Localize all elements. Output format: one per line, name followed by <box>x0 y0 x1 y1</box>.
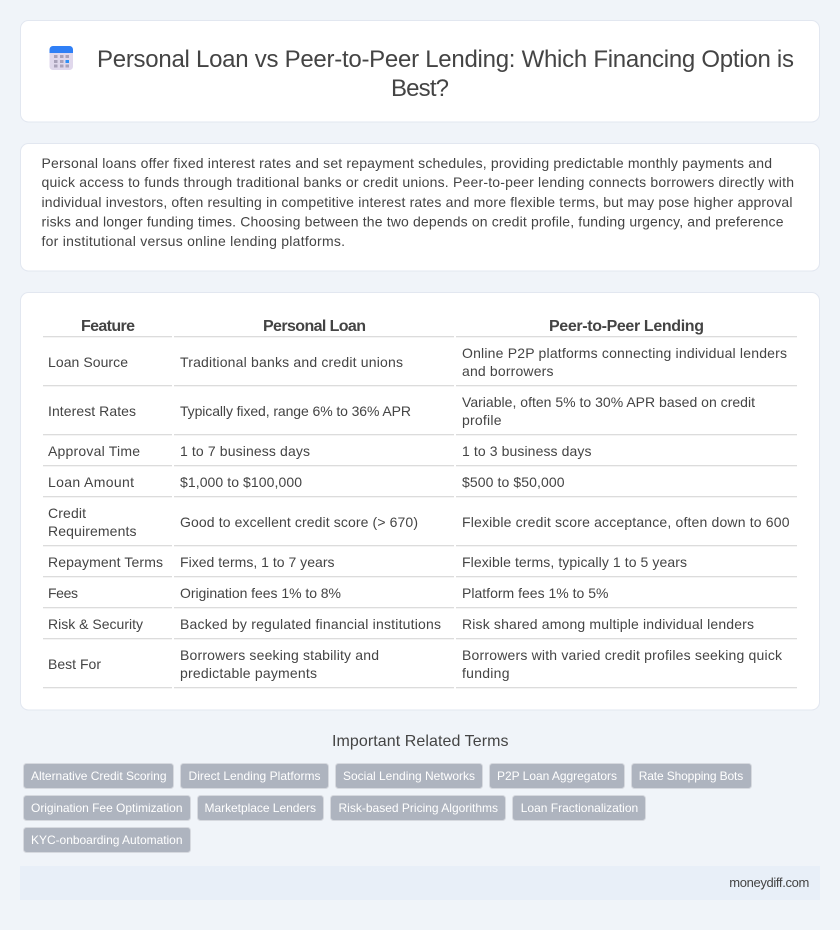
row: risk and security: Risk shared among multiple individual lenders <box>462 616 754 632</box>
footer <box>20 866 820 900</box>
row: repayment terms <box>48 554 687 570</box>
title <box>97 46 794 102</box>
chip: loan fractionalization: Loan Fractionalization <box>521 801 638 815</box>
title: Personal Loan vs Peer-to-Peer Lending: Which Financing Option is <box>97 46 794 73</box>
row: interest rates: Interest Rates <box>48 403 136 419</box>
row: interest rates <box>48 394 755 428</box>
row: loan source: and borrowers <box>462 363 554 379</box>
table header row: Peer-to-Peer Lending <box>549 318 704 335</box>
title: Best? <box>391 75 449 102</box>
row: repayment terms: Repayment Terms <box>48 554 163 570</box>
row: loan amount: Loan Amount <box>48 474 134 490</box>
panel: introduction text: for institutional versus online lending platforms. <box>42 233 345 249</box>
row: best for: funding <box>462 665 510 681</box>
table header row: Personal Loan <box>263 318 366 335</box>
row: loan source: Online P2P platforms connecting individual lenders <box>462 345 787 361</box>
chip: risk-based pricing algorithms: Risk-based Pricing Algorithms <box>338 801 498 815</box>
panel: title header <box>20 20 820 122</box>
panel: comparison table <box>20 292 820 710</box>
panel: introduction text: risks and longer funding times. Choosing between the two depends on credit profile, funding urgency, and preference <box>42 214 784 230</box>
panel: introduction text: individual investors, often resulting in competitive interest rates and more flexible terms, but may pose higher approval <box>42 194 792 210</box>
row: interest rates: profile <box>462 412 502 428</box>
row: loan source: Traditional banks and credit unions <box>180 354 403 370</box>
panel: introduction text: quick access to funds through traditional banks or credit unions. Peer-to-peer lending connects borrowers directly with <box>42 174 794 190</box>
row: interest rates: Typically fixed, range 6% to 36% APR <box>180 403 411 419</box>
row: risk and security: Backed by regulated financial institutions <box>180 616 441 632</box>
footer: moneydiff.com <box>729 875 809 890</box>
row: fees <box>48 585 608 601</box>
table header row: Feature <box>81 318 135 335</box>
row: fees: Fees <box>48 585 78 601</box>
chip: kyc-onboarding automation <box>24 828 190 852</box>
row: risk and security <box>48 616 754 632</box>
row: loan amount: $500 to $50,000 <box>462 474 565 490</box>
panel: introduction text <box>20 144 820 271</box>
chip: alternative credit scoring <box>24 764 174 788</box>
row: loan amount <box>48 474 565 490</box>
row: fees: Platform fees 1% to 5% <box>462 585 608 601</box>
chip: rate shopping bots <box>632 764 752 788</box>
row: best for: Borrowers seeking stability and <box>180 647 379 663</box>
row: credit requirements: Requirements <box>48 523 136 539</box>
row: loan source: Loan Source <box>48 354 128 370</box>
row: approval time <box>48 443 592 459</box>
chip: direct lending platforms: Direct Lending Platforms <box>188 769 320 783</box>
table header row <box>81 318 704 335</box>
chip: origination fee optimization <box>24 796 190 820</box>
row: approval time: 1 to 7 business days <box>180 443 310 459</box>
chip: origination fee optimization: Origination Fee Optimization <box>31 801 182 815</box>
row: credit requirements: Credit <box>48 505 86 521</box>
row: credit requirements: Flexible credit score acceptance, often down to 600 <box>462 514 790 530</box>
icon: calendar <box>50 46 73 70</box>
row: approval time: 1 to 3 business days <box>462 443 592 459</box>
row: loan source <box>48 345 787 379</box>
row: best for: predictable payments <box>180 665 317 681</box>
related terms chips <box>24 764 752 852</box>
chip: risk-based pricing algorithms <box>330 796 506 820</box>
row: credit requirements <box>48 505 790 539</box>
chip: loan fractionalization <box>512 796 646 820</box>
chip: alternative credit scoring: Alternative Credit Scoring <box>31 769 166 783</box>
row: interest rates: Variable, often 5% to 30% APR based on credit <box>462 394 755 410</box>
panel: introduction text: Personal loans offer fixed interest rates and set repayment schedules, providing predictable monthly payments and <box>42 155 772 171</box>
row: credit requirements: Good to excellent credit score (> 670) <box>180 514 418 530</box>
row: risk and security: Risk & Security <box>48 616 143 632</box>
chip: social lending networks: Social Lending Networks <box>343 769 475 783</box>
row: fees: Origination fees 1% to 8% <box>180 585 341 601</box>
chip: marketplace lenders: Marketplace Lenders <box>204 801 316 815</box>
row: approval time: Approval Time <box>48 443 140 459</box>
heading: important related terms: Important Related Terms <box>332 733 508 750</box>
row: loan amount: $1,000 to $100,000 <box>180 474 302 490</box>
row: best for: Best For <box>48 656 101 672</box>
chip: marketplace lenders <box>198 796 324 820</box>
chip: kyc-onboarding automation: KYC-onboarding Automation <box>31 833 182 847</box>
chip: social lending networks <box>336 764 482 788</box>
chip: rate shopping bots: Rate Shopping Bots <box>639 769 743 783</box>
row: best for <box>48 647 783 681</box>
chip: p2p loan aggregators: P2P Loan Aggregators <box>497 769 617 783</box>
row: repayment terms: Flexible terms, typically 1 to 5 years <box>462 554 687 570</box>
row: repayment terms: Fixed terms, 1 to 7 years <box>180 554 334 570</box>
chip: p2p loan aggregators <box>490 764 624 788</box>
row: best for: Borrowers with varied credit profiles seeking quick <box>462 647 783 663</box>
chip: direct lending platforms <box>180 764 328 788</box>
